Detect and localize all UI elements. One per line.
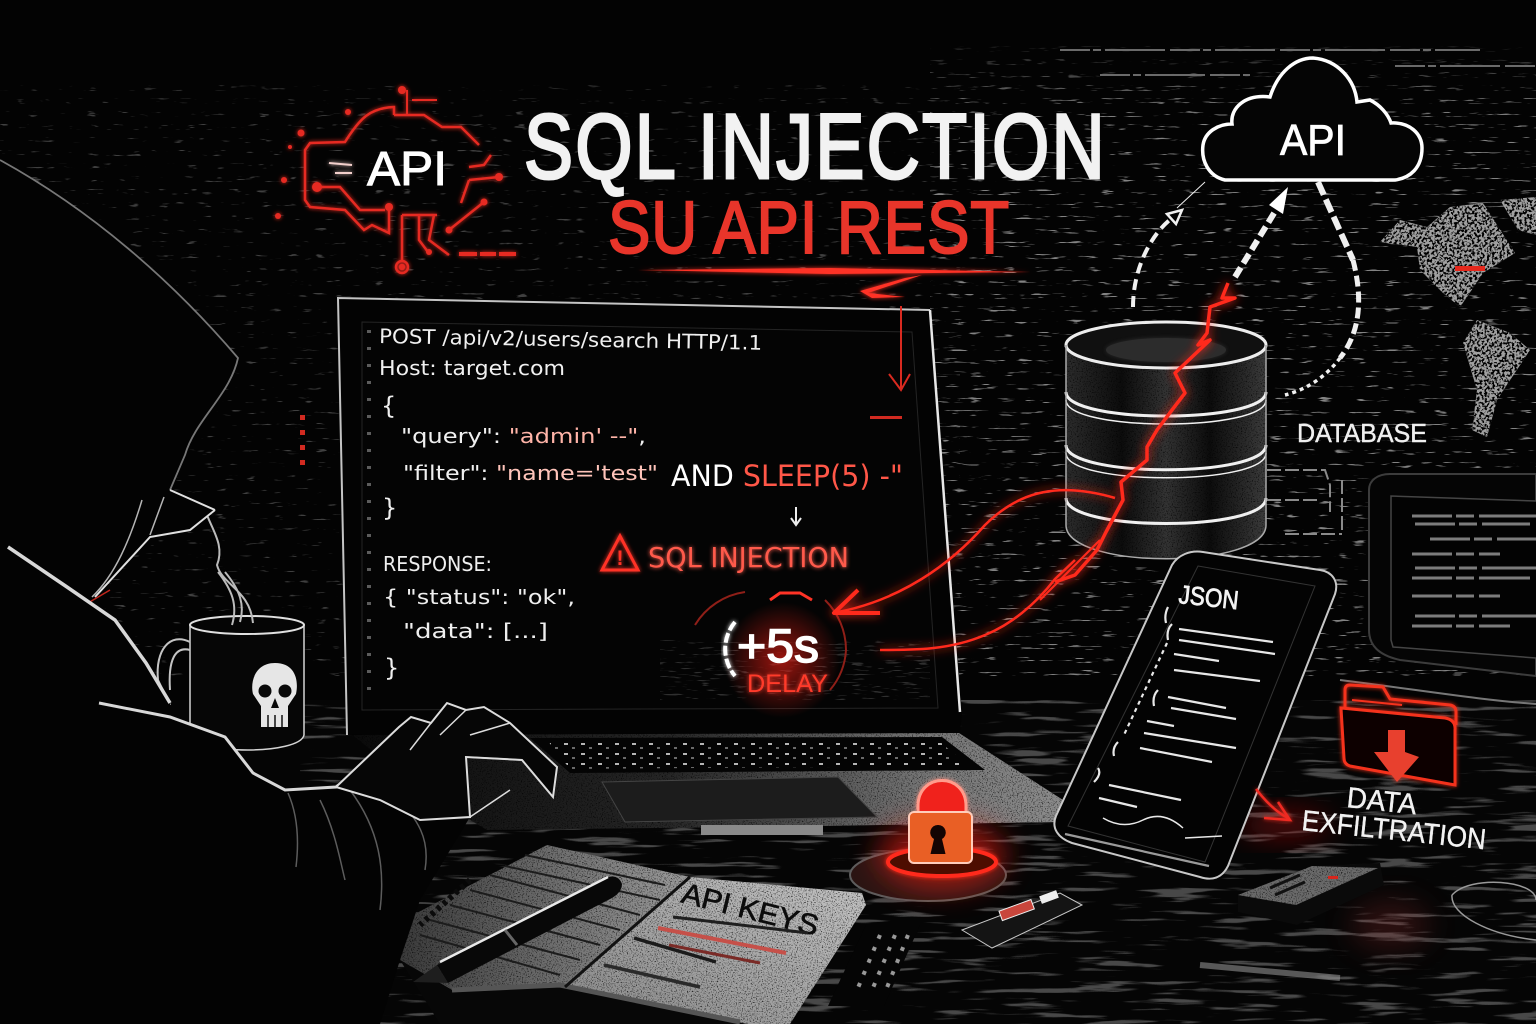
warning: SQL injection: SQL INJECTION [648,541,849,574]
world map [1380,197,1536,437]
desk surface [0,680,1536,1024]
arrows: cloud to database [1133,182,1359,395]
hooded hacker silhouette [0,160,470,1024]
red lightning through database [834,283,1235,650]
cloud API icon: API [1280,116,1346,165]
smartphone JSON [1054,552,1336,879]
red code accents [300,415,305,465]
folder data exfiltration icon [1341,685,1456,785]
red lightning underline [638,268,1031,298]
title: SU API REST [608,186,1010,269]
laptop [338,298,1063,835]
code: response: } [384,654,399,682]
injected payload: AND SLEEP(5) -" [671,459,903,493]
laptop screen [338,298,962,735]
hacker hand on keyboard [336,703,557,820]
code: HTTP request [379,324,762,522]
icon: API circuit chip [275,86,516,273]
coffee mug with skull [158,510,304,750]
steam [205,510,253,625]
warning: SQL injection: ! [616,547,624,570]
arrow: red from underline to screen [889,306,910,390]
USB device [1238,863,1384,925]
delay timer: DELAY [747,670,828,698]
code: HTTP request: "query": "admin' --", [401,424,646,448]
server rack outline [1267,470,1342,534]
background monitor [1369,474,1536,676]
title: SQL INJECTION [524,96,1107,198]
code: response: { "status": "ok", [383,585,575,609]
padlock on red glow [850,780,1006,901]
database cylinder [1066,322,1266,559]
code: response: RESPONSE: [383,552,492,576]
cloud API icon [1203,58,1422,180]
data exfiltration label [1300,782,1488,856]
calculator device [828,925,920,1006]
JSON label: JSON [1177,579,1240,615]
data exfiltration label: EXFILTRATION [1300,805,1488,856]
code: HTTP request: Host: target.com [379,356,565,380]
payload underline [745,496,880,498]
keys and trinket [962,890,1082,948]
database label: DATABASE [1297,418,1427,448]
JSON lines [1065,607,1275,866]
delay timer [695,592,846,718]
icon label: API: API [367,143,447,196]
title [524,96,1107,269]
code: HTTP request: { [381,392,396,420]
laptop base and keyboard [350,733,1063,835]
code: response [383,552,575,682]
code: HTTP request: POST /api/v2/users/search HTTP/1.1 [379,324,762,355]
icon: skull [252,663,297,727]
code: HTTP request: } [382,494,397,522]
warning: SQL injection [602,536,849,574]
code: HTTP request: "filter": "name='test" [403,461,658,485]
notebook API KEYS [400,845,866,1024]
notebook heading: API KEYS [678,878,822,943]
arrow: phone to folder [1256,789,1290,820]
red screen mark [870,416,902,419]
data exfiltration label: DATA [1345,782,1419,821]
delay timer: +5s [737,619,819,672]
pen [413,876,622,983]
small down arrow [791,507,801,525]
code: response: "data": [...] [403,619,548,643]
